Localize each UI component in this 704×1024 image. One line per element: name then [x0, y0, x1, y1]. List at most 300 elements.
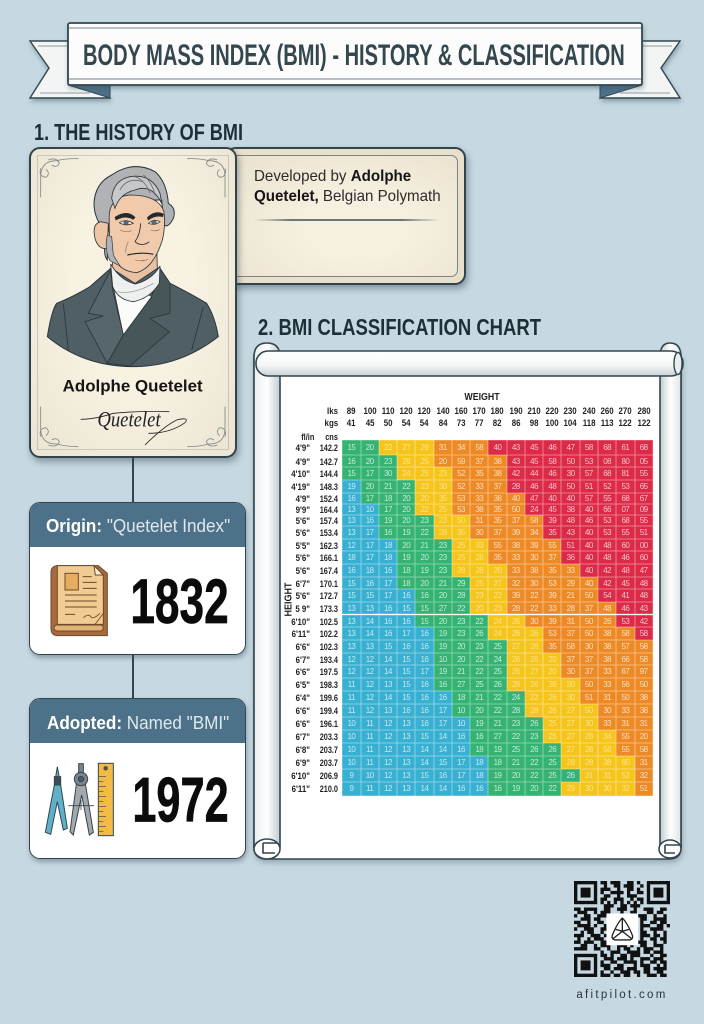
chart: BMI table: 25: [421, 457, 428, 466]
chart: BMI table: 22: [548, 784, 556, 793]
chart: BMI table: 152.4: [320, 493, 338, 504]
chart: BMI table: 35: [548, 528, 556, 537]
chart: BMI table: 39: [548, 616, 556, 626]
chart: BMI table: 11: [348, 680, 355, 689]
chart: BMI table: 23: [384, 457, 392, 466]
chart: BMI table: 12: [384, 784, 392, 793]
chart: BMI table: 50: [585, 706, 593, 715]
header: kilograms: 86: [511, 417, 520, 428]
chart: BMI table: 22: [530, 693, 538, 702]
chart: BMI table: 66: [621, 655, 629, 664]
chart: BMI table: 15: [347, 443, 355, 452]
chart: BMI table: 13: [366, 604, 374, 613]
chart: BMI table: 33: [512, 553, 520, 562]
chart: BMI table: 9: [349, 784, 353, 793]
chart: BMI table: 17: [402, 629, 410, 638]
chart: BMI table: 50: [585, 680, 593, 689]
neck: [112, 247, 157, 283]
inner frame: [231, 155, 458, 277]
header: kilograms: 41: [347, 417, 356, 428]
title banner: [28, 22, 684, 104]
chart: BMI table: 15: [384, 642, 392, 651]
chart: BMI table: 58: [640, 655, 648, 664]
chart: BMI table: 58: [640, 745, 648, 754]
chart: BMI table: 35: [457, 528, 465, 537]
origin header: [30, 503, 245, 547]
developer text: [254, 168, 441, 204]
chart: BMI table: 16: [457, 745, 465, 754]
chart: BMI table: 37: [475, 457, 483, 466]
chart: BMI table: 40: [567, 494, 575, 503]
chart: BMI table: 12: [347, 655, 355, 664]
chart: BMI table: 58: [621, 629, 629, 638]
chart: BMI table: 193.4: [320, 654, 338, 665]
chart: BMI table: 29: [421, 443, 428, 452]
chart: BMI table: 28: [475, 553, 483, 562]
chart: BMI table: 35: [439, 494, 447, 503]
chart: BMI table: 16: [402, 591, 410, 600]
chart: BMI table: 37: [494, 482, 502, 491]
chart: BMI table: 21: [439, 579, 447, 588]
bottom curls: [254, 839, 681, 859]
chart: BMI table: 44: [530, 469, 538, 478]
chart: BMI table: 16: [347, 566, 355, 575]
chart: BMI table: 57: [585, 469, 593, 478]
chart: BMI table: 22: [402, 482, 410, 491]
chart: BMI table: 33: [603, 680, 611, 689]
chart: BMI table: 22: [494, 591, 502, 600]
chart: BMI table: 38: [603, 758, 611, 767]
chart: BMI table: 20: [402, 505, 410, 514]
chart: BMI table: 102.5: [320, 616, 338, 626]
chart: BMI table: 13: [402, 745, 410, 754]
chart: BMI table: 68: [603, 469, 611, 478]
chart: BMI table: 25: [457, 541, 465, 550]
chart: BMI table: 17: [366, 528, 374, 537]
chart: BMI table: 30: [585, 719, 593, 728]
header: pounds: 120: [418, 405, 431, 416]
chart: BMI table: 22: [512, 732, 520, 741]
chart: BMI table: 20: [457, 655, 465, 664]
chart: BMI table: 37: [567, 629, 575, 638]
chart: BMI table: 42: [603, 566, 611, 575]
chart: BMI table: 42: [512, 469, 520, 478]
chart: BMI table: 50: [585, 616, 593, 626]
chart: BMI table: 53: [603, 528, 611, 537]
chart: BMI table: 46: [548, 443, 556, 452]
chart: BMI table: 58: [585, 443, 593, 452]
chart: BMI table: 31: [640, 719, 648, 728]
chart: BMI table: 16: [457, 784, 465, 793]
chart: BMI table: 22: [421, 505, 428, 514]
chart: BMI table: 42: [603, 579, 611, 588]
chart: BMI table: 173.3: [320, 603, 338, 614]
chart: BMI table: 00: [640, 541, 648, 550]
chart: BMI table: 26: [530, 629, 538, 638]
chart: BMI table: 20: [457, 642, 465, 651]
chart: BMI table: 27: [512, 642, 520, 651]
chart: BMI table: 08: [603, 457, 611, 466]
chart: BMI table: 25: [548, 719, 556, 728]
adopted header: Adopted: Named "BMI": [47, 713, 229, 733]
header: pounds: 89: [347, 405, 356, 416]
chart: BMI table: 35: [494, 553, 502, 562]
chart: BMI table: 48: [640, 579, 648, 588]
chart: BMI table: 21: [457, 667, 465, 676]
chart: BMI table: 26: [512, 629, 520, 638]
chart: BMI table: 22: [494, 706, 502, 715]
chart: BMI table: 38: [603, 655, 611, 664]
chart: BMI table: 38: [603, 629, 611, 638]
header: kilograms: 50: [384, 417, 392, 428]
chart: BMI table: 102.2: [320, 628, 338, 639]
header: kilograms: 104: [564, 417, 577, 428]
chart: BMI table: 15: [402, 604, 410, 613]
chart: BMI table: 41: [621, 591, 629, 600]
header: pounds: 220: [546, 405, 559, 416]
chart: BMI table: 198.3: [320, 679, 338, 690]
chart: BMI table: 18: [402, 566, 410, 575]
chart: BMI table: 28: [585, 758, 593, 767]
chart: BMI table: 48: [621, 566, 629, 575]
chart: BMI table: 46: [530, 482, 538, 491]
chart: BMI table: 53: [457, 494, 465, 503]
top rod: [256, 351, 683, 376]
chart: BMI table: 13: [384, 680, 392, 689]
chart: BMI table: 38: [567, 505, 575, 514]
chart: BMI table: 68: [621, 494, 629, 503]
coat: [47, 268, 218, 367]
chart: BMI table: 16: [421, 591, 428, 600]
chart: BMI table: 18: [475, 758, 483, 767]
header: kilograms: 45: [365, 417, 374, 428]
facial features: [115, 213, 163, 261]
chart: BMI table: 28: [585, 745, 593, 754]
chart: BMI table: 16: [384, 616, 392, 626]
chart: BMI table: lks: [327, 405, 338, 416]
chart: BMI table: 48: [603, 553, 611, 562]
chart: BMI table: 19: [494, 771, 502, 780]
chart: BMI table: 13: [366, 642, 374, 651]
chart: BMI table: 24: [494, 629, 502, 638]
chart: BMI table: 38: [640, 706, 648, 715]
chart: BMI table: 12: [384, 719, 392, 728]
chart: BMI table: 38: [475, 505, 483, 514]
chart: BMI table: 67: [621, 667, 629, 676]
chart: BMI table: 18: [475, 745, 483, 754]
chart: BMI table: 13: [347, 604, 355, 613]
chart: BMI table: 14: [421, 758, 428, 767]
chart: BMI table: 14: [384, 667, 392, 676]
chart: BMI table: 16: [439, 693, 447, 702]
chart: BMI table: 6'8": [296, 744, 310, 755]
chart: BMI table: 28: [567, 604, 575, 613]
chart: BMI table: 22: [421, 528, 428, 537]
chart: BMI table: 27: [530, 667, 538, 676]
chart: BMI table: 16: [384, 604, 392, 613]
chart: BMI table: 50: [621, 693, 629, 702]
chart: BMI table: 46: [621, 553, 629, 562]
chart: BMI table: 19: [384, 516, 392, 525]
chart: BMI table: 55: [494, 541, 502, 550]
chart: BMI table: 28: [512, 604, 520, 613]
chart: BMI table: 16: [384, 528, 392, 537]
chart: BMI table: 67: [640, 494, 648, 503]
chart: BMI table: 14: [366, 629, 374, 638]
chart: BMI table: 48: [603, 604, 611, 613]
chart: BMI table: 47: [640, 566, 648, 575]
chart: BMI table: 31: [585, 771, 593, 780]
chart: BMI table: 31: [603, 693, 611, 702]
header: kilograms: 113: [601, 417, 613, 428]
chart: BMI table: 16: [421, 706, 428, 715]
chart: BMI table: 4'9": [296, 456, 310, 467]
chart: BMI table: 33: [475, 494, 483, 503]
chart: BMI table: 12: [384, 732, 392, 741]
chart: BMI table: 39: [512, 591, 520, 600]
chart: BMI table: 28: [567, 758, 575, 767]
chart: BMI table: 11: [366, 784, 373, 793]
chart: BMI table: 27: [567, 732, 575, 741]
chart: BMI table: 22: [530, 604, 538, 613]
chart: BMI table: 26: [567, 771, 575, 780]
chart: BMI table: 13: [402, 732, 410, 741]
panel: portrait card: [29, 147, 237, 458]
chart: BMI table: 33: [475, 482, 483, 491]
QR code: [574, 881, 670, 977]
chart: BMI table: 6'7": [296, 654, 310, 665]
chart: BMI table: 13: [402, 784, 410, 793]
chart: BMI table: 15: [402, 655, 410, 664]
chart: BMI table: 43: [512, 443, 520, 452]
chart: BMI table: 12: [366, 655, 374, 664]
chart: BMI table: 26: [530, 680, 538, 689]
chart: BMI table: 53: [585, 457, 593, 466]
chart: BMI table: 203.7: [320, 757, 338, 768]
chart: BMI table: 37: [512, 516, 520, 525]
chart: BMI table: 57: [621, 642, 629, 651]
header: height units: fl/in: [301, 432, 314, 442]
chart: BMI table: 26: [548, 680, 556, 689]
chart: BMI table: 19: [347, 482, 355, 491]
chart: BMI table: 22: [494, 693, 502, 702]
chart: BMI table: 17: [366, 541, 374, 550]
chart: BMI table: 20: [366, 457, 374, 466]
chart: BMI table: 47: [530, 494, 538, 503]
chart: BMI table: 142.2: [320, 442, 338, 453]
chart: BMI table: 16: [421, 642, 428, 651]
chart: BMI table: 19: [402, 553, 410, 562]
chart: BMI table: 26: [530, 655, 538, 664]
chart: BMI table: 21: [494, 719, 502, 728]
chart: BMI table: 20: [402, 516, 410, 525]
name: Adolphe Quetelet: [63, 376, 203, 395]
chart: BMI table: 12: [347, 541, 355, 550]
chart: BMI table: 33: [475, 541, 483, 550]
chart: BMI table: 164.4: [320, 504, 338, 515]
chart: BMI table: 25: [475, 579, 483, 588]
chart: BMI table: 15: [402, 693, 410, 702]
chart: BMI table: 20: [512, 771, 520, 780]
chart: BMI table: 37: [567, 655, 575, 664]
chart: BMI table: 17: [457, 758, 465, 767]
icon: drafting tools: [45, 763, 113, 836]
header: kilograms: 54: [420, 417, 429, 428]
chart: BMI table: 11: [348, 693, 355, 702]
chart: BMI table: 15: [347, 469, 355, 478]
chart: BMI table: 17: [366, 494, 374, 503]
chart: BMI table: 17: [439, 719, 447, 728]
chart: BMI table: 30: [567, 680, 575, 689]
chart: BMI table: 38: [512, 541, 520, 550]
chart: BMI table: 10: [457, 719, 465, 728]
chart: BMI table: 19: [439, 629, 447, 638]
chart: BMI table: 26: [512, 667, 520, 676]
chart: BMI table: 14: [439, 745, 447, 754]
chart: BMI table: 5'6": [296, 552, 310, 563]
chart: BMI table: 51: [640, 784, 648, 793]
chart: BMI table: 14: [384, 655, 392, 664]
chart: BMI table: 18: [384, 553, 392, 562]
chart: BMI table: 30: [530, 553, 538, 562]
chart: BMI table: 27: [457, 680, 465, 689]
chart: BMI table: 58: [640, 642, 648, 651]
chart: BMI table: 17: [439, 706, 447, 715]
chart: BMI table: 40: [585, 553, 593, 562]
chart: BMI table: 30: [530, 579, 538, 588]
chart: BMI table: 48: [603, 541, 611, 550]
chart: BMI table: 24: [402, 469, 410, 478]
chart: BMI table: 45: [621, 579, 629, 588]
chart: BMI table: 19: [402, 528, 410, 537]
chart: BMI table: 13: [347, 642, 355, 651]
chart: BMI table: 10: [457, 706, 465, 715]
chart: BMI table: 14: [384, 693, 392, 702]
table rows: [291, 440, 653, 796]
chart: BMI table: 58: [548, 457, 556, 466]
chart: BMI table: 199.6: [320, 692, 338, 703]
chart: BMI table: 20: [475, 706, 483, 715]
chart: BMI table: 65: [640, 482, 648, 491]
chart: BMI table: 16: [366, 579, 374, 588]
chart: BMI table: 11: [366, 719, 373, 728]
chart: BMI table: 20: [421, 579, 428, 588]
chart: BMI table: 20: [439, 457, 447, 466]
heading: history of BMI: 1. THE HISTORY OF BMI: [34, 119, 243, 145]
chart: BMI table: 10: [347, 732, 355, 741]
chart: BMI table: 19: [494, 745, 502, 754]
chart: BMI table: 22: [384, 443, 392, 452]
chart: BMI table: 28: [585, 732, 593, 741]
chart: BMI table: 16: [384, 566, 392, 575]
chart: BMI table: 51: [585, 693, 593, 702]
header: pounds: 210: [528, 405, 541, 416]
chart: BMI table: 10: [366, 505, 374, 514]
chart: BMI table: 33: [603, 667, 611, 676]
chart: BMI table: 60: [621, 541, 629, 550]
chart: BMI table: 20: [530, 784, 538, 793]
chart: BMI table: 31: [640, 758, 648, 767]
chart: BMI table: 142.7: [320, 456, 338, 467]
chart: BMI table: 18: [347, 553, 355, 562]
header: pounds: [327, 405, 650, 416]
chart: BMI table: 40: [585, 566, 593, 575]
chart: BMI table: 22: [475, 616, 483, 626]
chart: BMI table: 20: [548, 667, 556, 676]
chart: BMI table: 23: [421, 482, 428, 491]
header: pounds: 140: [436, 405, 449, 416]
chart: BMI table: 22: [530, 591, 538, 600]
chart: BMI table: 16: [421, 719, 428, 728]
chart: BMI table: 23: [475, 642, 483, 651]
chart: BMI table: 23: [475, 591, 483, 600]
chart: BMI table: 16: [347, 457, 355, 466]
chart: BMI table: 32: [621, 784, 629, 793]
chart: BMI table: 13: [347, 629, 355, 638]
chart: BMI table: 34: [457, 443, 465, 452]
chart: BMI table: 30: [603, 784, 611, 793]
chart: BMI table: 68: [621, 516, 629, 525]
chart: BMI table: 15: [421, 732, 428, 741]
chart: BMI table: 31: [439, 443, 447, 452]
chart: BMI table: 16: [402, 706, 410, 715]
header: kilograms: 118: [583, 417, 595, 428]
chart: BMI table: 19: [421, 566, 428, 575]
chart: BMI table: 30: [567, 469, 575, 478]
chart: BMI table: 20: [402, 541, 410, 550]
chart: BMI table: 12: [384, 771, 392, 780]
chart: BMI table: 17: [366, 469, 374, 478]
chart: BMI table: 11: [366, 758, 373, 767]
header: pounds: 120: [400, 405, 413, 416]
chart: BMI table: 17: [384, 591, 392, 600]
header: pounds: 170: [473, 405, 486, 416]
chart: BMI table: 25: [439, 505, 447, 514]
chart: BMI table: 25: [494, 667, 502, 676]
chart: BMI table: 13: [384, 706, 392, 715]
chart: BMI table: 40: [585, 541, 593, 550]
chart: BMI table: 12: [366, 706, 374, 715]
chart: BMI table: 15: [402, 667, 410, 676]
header: pounds: 240: [582, 405, 595, 416]
header: kilograms: 122: [619, 417, 632, 428]
chart: BMI table: 16: [475, 732, 483, 741]
chart: BMI table: 21: [567, 591, 575, 600]
chart: BMI table: 170.1: [320, 578, 338, 589]
chart: BMI table: 37: [494, 528, 502, 537]
chart: BMI table: 16: [421, 629, 428, 638]
chart: BMI table: 14: [421, 784, 428, 793]
chart: BMI table: 55: [548, 541, 556, 550]
chart: BMI table: 20: [421, 553, 428, 562]
chart: BMI table: 53: [548, 629, 556, 638]
chart: BMI table: 14: [439, 784, 447, 793]
chart: BMI table: 26: [548, 745, 556, 754]
header: pounds: 280: [637, 405, 650, 416]
chart: BMI table: 38: [640, 693, 648, 702]
year: 1832: 1832: [130, 567, 229, 637]
chart: BMI table: 20: [494, 566, 502, 575]
chart: BMI table: 21: [384, 482, 392, 491]
chart: BMI table: 6'6": [296, 718, 310, 729]
header: pounds: 270: [619, 405, 632, 416]
chart: BMI table: 5'6": [296, 515, 310, 526]
chart: BMI table: 6'6": [296, 641, 310, 652]
chart: BMI table: 58: [475, 443, 483, 452]
chart: BMI table: 102.3: [320, 641, 338, 652]
chart: BMI table: 17: [421, 667, 428, 676]
chart: BMI table: 50: [567, 482, 575, 491]
